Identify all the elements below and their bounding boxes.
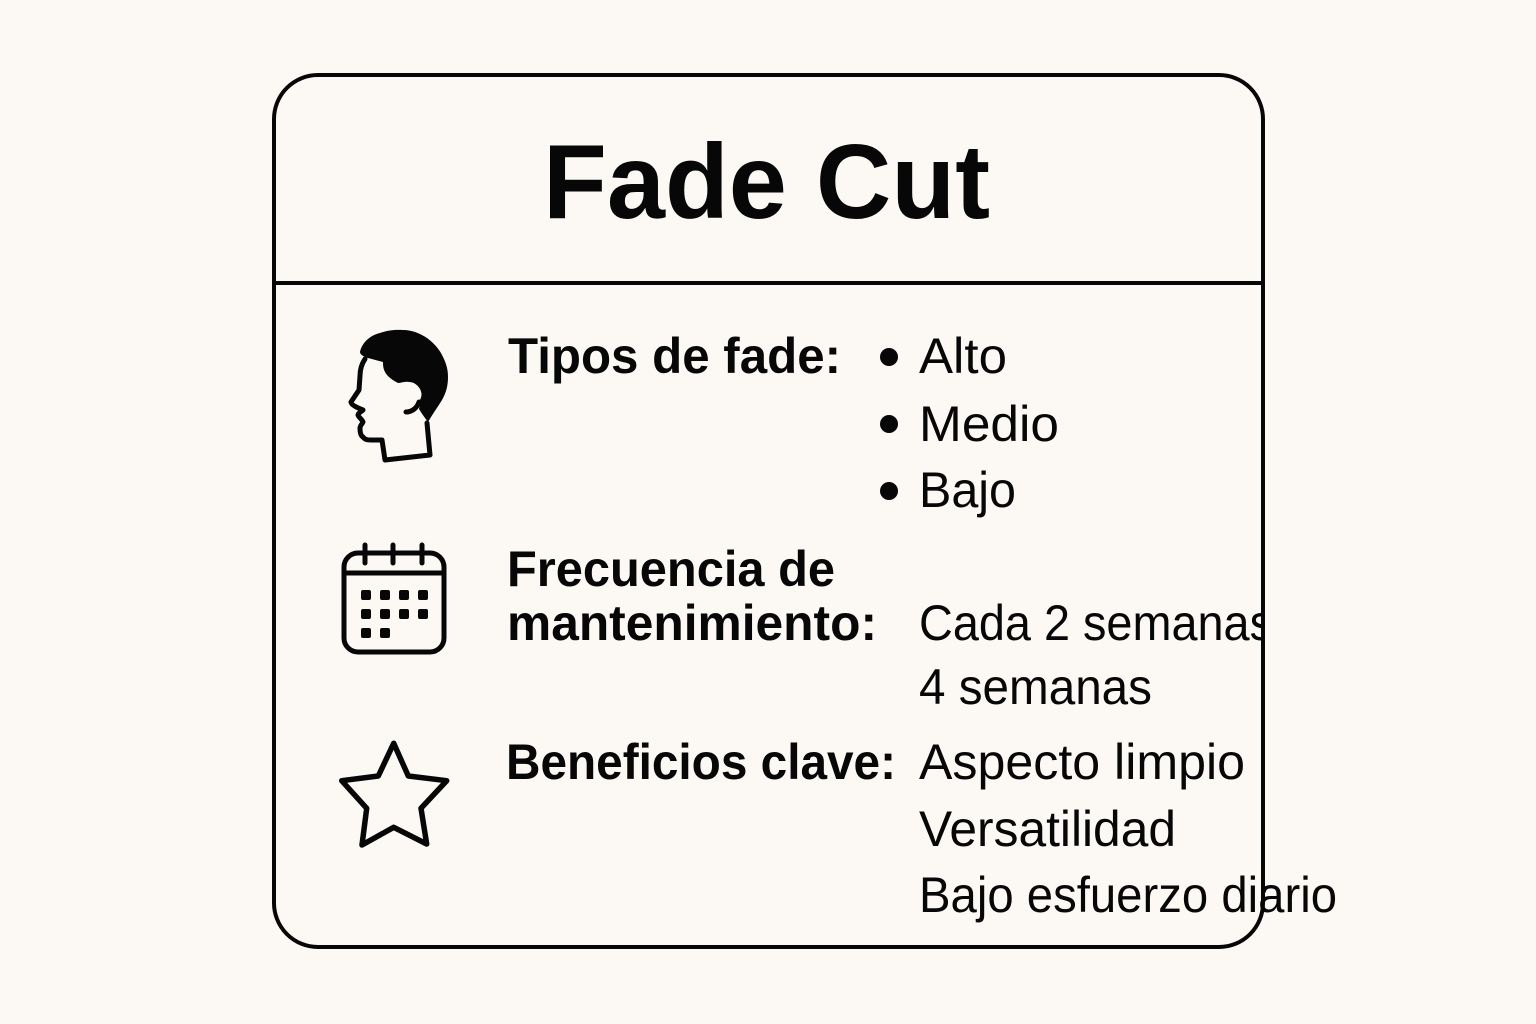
bullet list: tipos: Bajo [919,462,1016,518]
icon: head profile [351,330,448,460]
row: beneficios clave [342,734,1337,923]
text: frecuencia value: 4 semanas [919,659,1152,715]
label: frecuencia de mantenimiento [507,541,877,651]
label: frecuencia de mantenimiento: Frecuencia de [507,541,835,597]
label: frecuencia de mantenimiento: mantenimiento: [507,595,877,651]
list: beneficios: Aspecto limpio [919,734,1245,790]
bullet list: tipos: Alto [919,328,1007,384]
label: tipos de fade: Tipos de fade: [508,328,841,384]
list: beneficios: Versatilidad [919,801,1176,857]
bullet list: tipos [880,328,1059,518]
card frame [274,75,1263,947]
text: frecuencia value: Cada 2 semanas [919,595,1273,651]
title: Fade Cut [543,123,990,241]
label: beneficios clave: Beneficios clave: [506,734,896,790]
list: beneficios: Bajo esfuerzo diario [919,867,1337,923]
icon: calendar [344,545,444,652]
bullet list: tipos: Medio [919,396,1059,452]
row: frecuencia de mantenimiento [344,541,1273,715]
icon: star [342,743,447,845]
text: frecuencia value [920,604,1261,704]
row: tipos de fade [351,328,1059,518]
list: beneficios [919,734,1337,923]
